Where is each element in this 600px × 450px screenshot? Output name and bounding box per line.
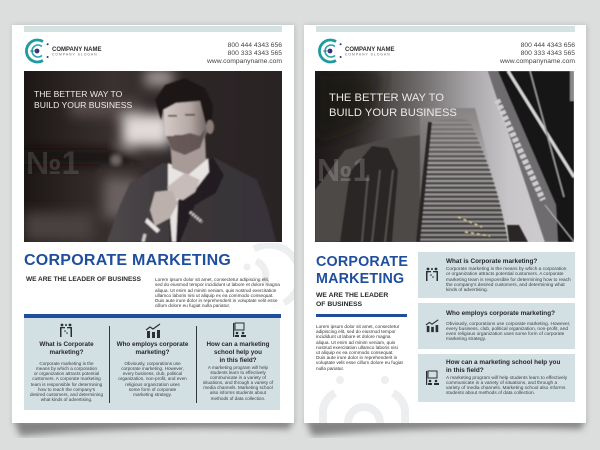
intro paragraph: sed do eiusmod tempor incididunt ut labore et dolore magna: [155, 282, 280, 287]
blue rule: [316, 314, 407, 317]
photo headline: BUILD YOUR BUSINESS: [329, 107, 457, 119]
intro paragraph: [155, 277, 280, 308]
body text: organization, non-profit, and even: [118, 376, 187, 381]
watermark: [319, 376, 409, 423]
body text: media channels. Marketing school: [203, 385, 273, 390]
top strip: [316, 26, 575, 32]
intro paragraph: nulla pariatur.: [316, 366, 344, 371]
contact details: www.companyname.com: [207, 58, 282, 65]
intro paragraph: cillum dolore eu fugiat nulla pariatur.: [155, 303, 230, 308]
heading: [39, 341, 94, 356]
panel: left flyer: [12, 25, 294, 423]
hero photo: skyscrapers: №1: [317, 152, 370, 188]
icon: team: [60, 324, 72, 337]
body text: communicate in a variety of: [210, 375, 266, 380]
body text: or organization attracts potential: [34, 371, 99, 376]
body text: marketing strategy.: [133, 392, 172, 397]
blue rule: [24, 314, 281, 318]
body text: [446, 322, 570, 342]
logo: COMPANY SLOGAN: [345, 52, 391, 56]
icon: growth chart: [426, 319, 438, 332]
intro paragraph: Duis aute irure dolor in reprehenderit in voluptate velit esse: [155, 298, 277, 303]
logo: [25, 38, 102, 64]
photo headline: [34, 89, 132, 110]
intro paragraph: Lorem ipsum dolor sit amet, consectetur adipiscing elit,: [155, 277, 269, 282]
contact details: 800 333 4343 565: [228, 50, 282, 57]
intro paragraph: aliqua. Ut enim ad minim veniam, quis nostrud exercitation: [155, 288, 276, 293]
body text: Obviously, corporations use corporate marketing. However,: [446, 322, 570, 326]
panel: right flyer: [304, 25, 586, 423]
body text: [30, 361, 103, 402]
divider: [196, 326, 197, 403]
body text: how to reach the company's: [38, 387, 95, 392]
heading: How can a marketing school help you: [446, 359, 560, 366]
intro paragraph: nostrud exercitation ullamco laboris nisi: [316, 345, 398, 350]
intro paragraph: adipiscing elit, sed do eiusmod tempor: [316, 329, 396, 334]
heading: [206, 341, 270, 364]
intro paragraph: [316, 324, 403, 371]
icon: team: [426, 268, 438, 281]
intro paragraph: aliqua. Ut enim ad minim veniam, quis: [316, 340, 395, 345]
hero photo: skyscrapers: [315, 71, 574, 242]
contact details: www.companyname.com: [500, 58, 575, 65]
photo headline: [329, 92, 457, 119]
contact details: 800 444 4343 656: [228, 42, 282, 49]
body text: kinds of advertising.: [446, 288, 488, 293]
body text: customers. A corporate marketing: [32, 376, 101, 381]
card: what is corporate marketing: [418, 252, 575, 298]
column: who employs: [116, 324, 188, 397]
subtitle: [316, 292, 388, 308]
heading: marketing?: [136, 349, 169, 356]
logo: COMPANY SLOGAN: [52, 52, 98, 56]
body text: A marketing program will help students learn to effectively: [446, 376, 567, 381]
photo headline: THE BETTER WAY TO: [329, 92, 444, 104]
contact details: [207, 42, 282, 65]
logo: COMPANY NAME: [52, 47, 101, 53]
intro paragraph: ullamco laboris nisi ut aliquip ex ea commodo consequat.: [155, 293, 274, 298]
logo: COMPANY NAME: [345, 47, 394, 53]
main title: [316, 254, 408, 287]
contact details: 800 333 4343 565: [521, 50, 575, 57]
jacket: [107, 157, 276, 242]
photo headline: BUILD YOUR BUSINESS: [34, 100, 132, 110]
top strip: [24, 26, 282, 32]
body text: [203, 365, 274, 401]
main title: CORPORATE MARKETING: [24, 252, 231, 269]
column: marketing school: [203, 322, 274, 401]
icon: presentation: [233, 322, 246, 337]
heading: What is Corporate: [39, 341, 94, 348]
card: marketing school: [418, 354, 575, 402]
heading: Who employs corporate: [117, 341, 188, 348]
hero photo: businessman: [24, 71, 282, 242]
body text: Obviously, corporations use: [124, 361, 181, 366]
body text: students about methods of data collection.: [446, 391, 535, 396]
body text: [446, 376, 568, 396]
hero photo: businessman: №1: [26, 145, 79, 181]
main title: CORPORATE: [316, 254, 408, 270]
subtitle: WE ARE THE LEADER: [316, 292, 388, 299]
body text: situations, and through a variety of: [203, 380, 273, 385]
subtitle: WE ARE THE LEADER OF BUSINESS: [26, 276, 141, 283]
small dark building: [507, 225, 528, 242]
body text: marketing strategy.: [446, 337, 486, 342]
central tower: [418, 115, 508, 242]
heading: school help you: [214, 349, 262, 356]
column: what is corporate marketing: [30, 324, 103, 402]
body text: every business, club, political organization, non-profit, and: [446, 327, 568, 332]
hands: [167, 173, 200, 200]
body text: or organization attracts potential customers. A corporate: [446, 272, 564, 277]
heading: [446, 359, 560, 374]
body text: students learn to effectively: [210, 370, 266, 375]
intro paragraph: voluptate velit esse cillum dolore eu fugiat: [316, 360, 403, 365]
body text: communicate in a variety of situations, and through a: [446, 381, 557, 386]
logo: [318, 38, 394, 64]
heading: What is Corporate marketing?: [446, 258, 537, 265]
intro paragraph: Duis aute irure dolor in reprehenderit in: [316, 355, 397, 360]
right structure: [488, 71, 574, 242]
body text: the company's desired customers, and determining what: [446, 283, 565, 288]
icon: growth chart: [146, 324, 160, 338]
divider: [109, 326, 110, 403]
body text: variety of media channels. Marketing school also informs: [446, 386, 565, 391]
body text: team is responsible for determining: [31, 382, 102, 387]
body text: some form of corporate: [129, 387, 176, 392]
contact details: [500, 42, 575, 65]
body text: means by which a corporation: [36, 366, 97, 371]
body text: methods of data collection.: [211, 396, 265, 401]
intro paragraph: incididunt ut labore et dolore magna: [316, 334, 391, 339]
body text: [118, 361, 187, 397]
body text: Corporate marketing is the: [39, 361, 94, 366]
body text: every business, club, political: [123, 371, 182, 376]
heading: How can a marketing: [206, 341, 270, 348]
card: who employs: [418, 303, 575, 349]
left building: [315, 135, 420, 242]
panel: three questions: [24, 315, 280, 410]
body text: Corporate marketing is the means by which a corporation: [446, 267, 566, 272]
main title: MARKETING: [316, 271, 404, 287]
body text: A marketing program will help: [208, 365, 268, 370]
body text: religious organization uses: [125, 382, 180, 387]
heading: Who employs corporate marketing?: [446, 310, 555, 317]
heading: marketing?: [50, 349, 83, 356]
watermark: [244, 243, 294, 306]
body text: [446, 266, 571, 293]
heading: in this field?: [446, 367, 484, 374]
body text: desired customers, and determining: [30, 392, 103, 397]
photo headline: THE BETTER WAY TO: [34, 89, 122, 99]
shirt: [168, 158, 209, 242]
body text: corporate marketing. However,: [121, 366, 184, 371]
icon: presentation: [426, 370, 439, 385]
body text: even religious organization uses some form of corporate: [446, 332, 564, 337]
neck and face: [170, 135, 206, 175]
heading: in this field?: [219, 357, 257, 364]
intro paragraph: ut aliquip ex ea commodo consequat.: [316, 350, 394, 355]
body text: also informs students about: [210, 390, 266, 395]
intro paragraph: Lorem ipsum dolor sit amet, consectetur: [316, 324, 399, 329]
heading: [116, 341, 188, 356]
body text: marketing team is responsible for determining how to reach: [446, 278, 571, 282]
contact details: 800 444 4343 656: [521, 42, 575, 49]
body text: what kinds of advertising.: [41, 397, 92, 402]
subtitle: OF BUSINESS: [316, 301, 362, 308]
